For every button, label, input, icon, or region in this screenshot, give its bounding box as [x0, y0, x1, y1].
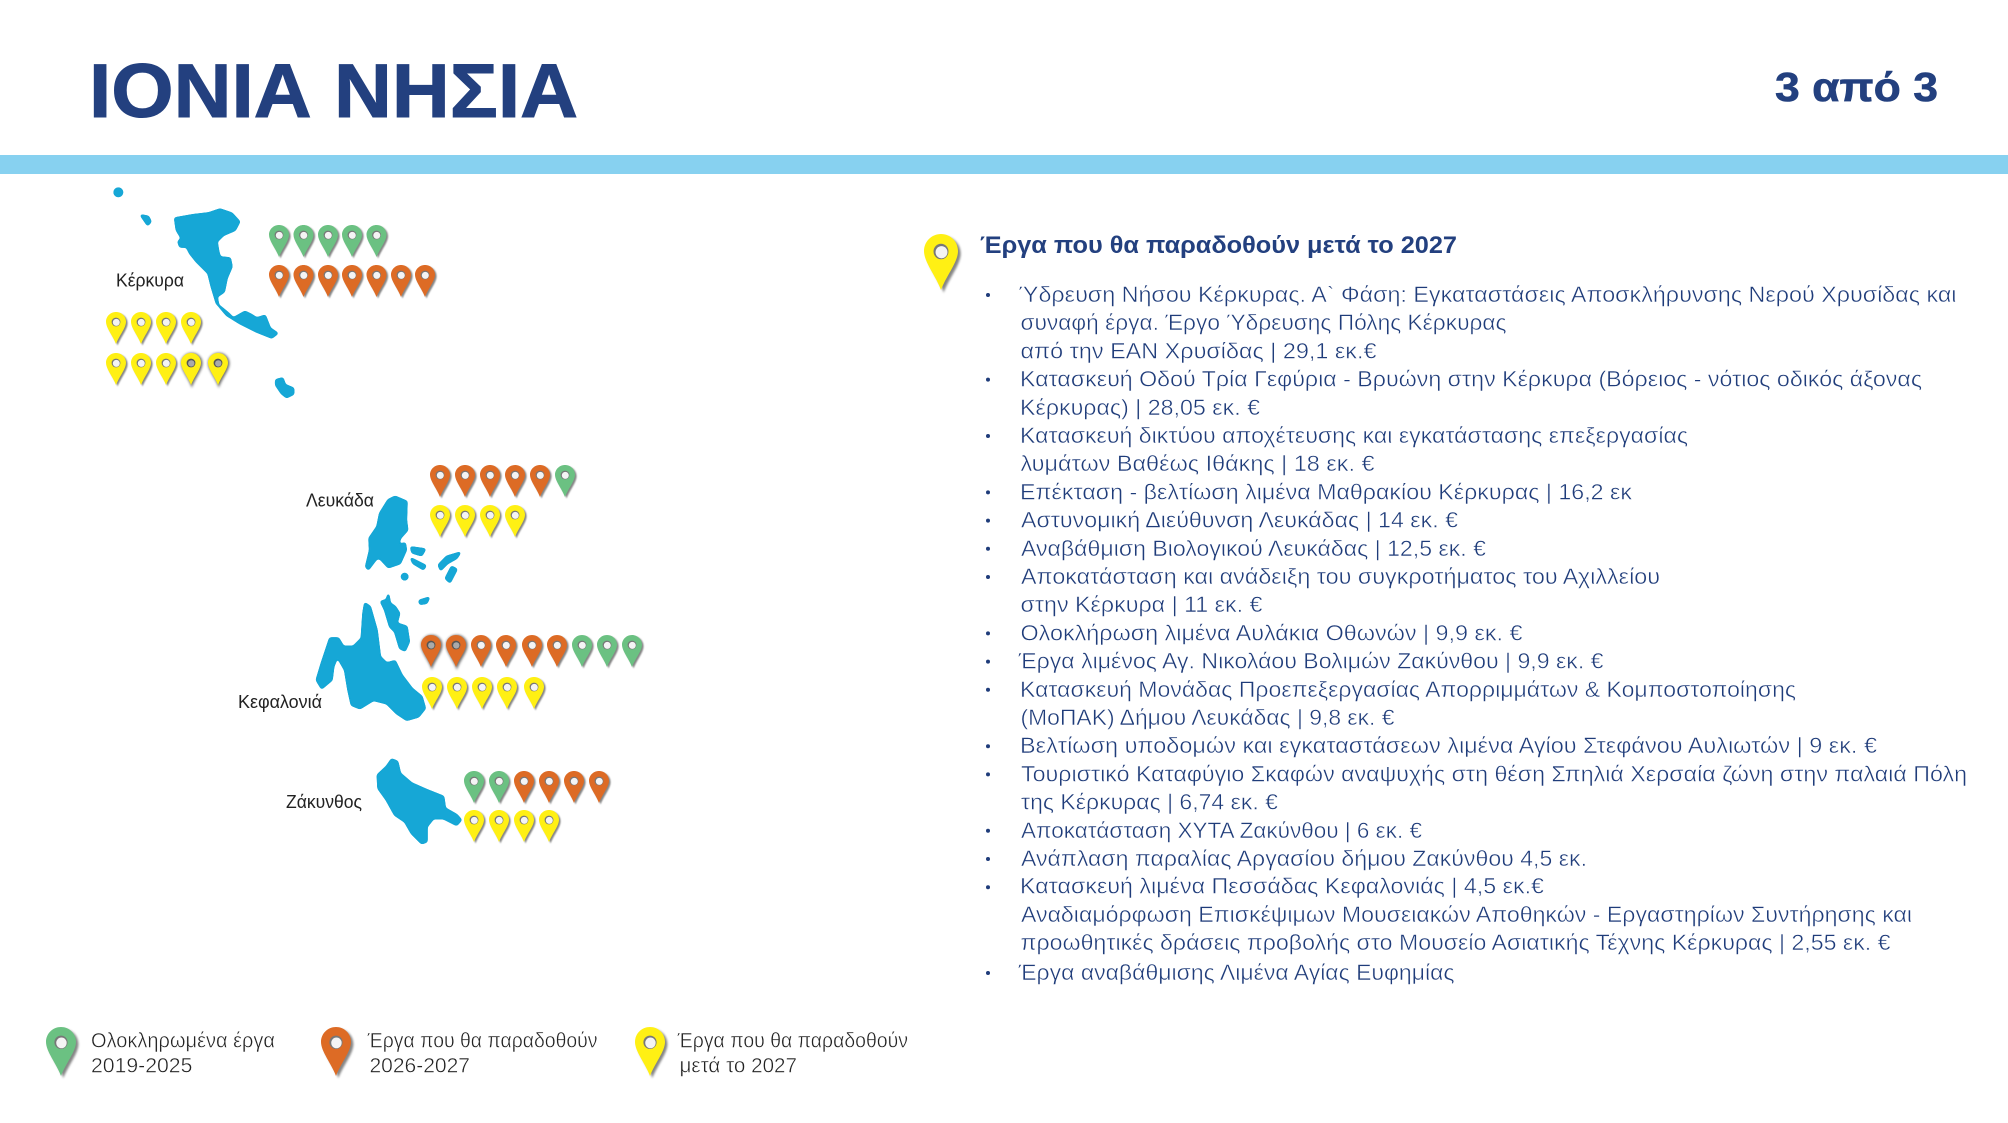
- pins: Corfu completed: [269, 225, 388, 258]
- label: Zakynthos: Ζάκυνθος: [286, 792, 362, 812]
- map: Zakynthos group: [286, 759, 611, 843]
- item 16: Έργα αναβάθμισης Λιμένα Αγίας Ευφημίας: [1017, 960, 1454, 985]
- pins: Kefalonia 2026-2027 and completed: [421, 635, 644, 668]
- item 1: Ύδρευση Νήσου Κέρκυρας. Α` Φάση: Εγκαταστάσεις Αποσκλήρυνσης Νερού Χρυσίδας και: [1018, 282, 1957, 307]
- legend: [46, 1027, 908, 1078]
- pins: Lefkada after 2027: [430, 505, 527, 538]
- item 7: στην Κέρκυρα | 11 εκ. €: [1020, 592, 1262, 617]
- map: Corfu group: [106, 188, 437, 397]
- pins: Corfu after 2027: [106, 312, 229, 386]
- label: Kefalonia: Κεφαλονιά: [238, 692, 322, 712]
- label: Corfu: Κέρκυρα: [116, 271, 184, 291]
- item 9: Έργα λιμένος Αγ. Νικολάου Βολιμών Ζακύνθου | 9,9 εκ. €: [1017, 649, 1604, 674]
- item 1: συναφή έργα. Έργο Ύδρευσης Πόλης Κέρκυρας: [1020, 310, 1506, 335]
- item 10: Κατασκευή Μονάδας Προεπεξεργασίας Απορριμμάτων & Κομποστοποίησης: [1020, 677, 1796, 702]
- project list: [986, 282, 1967, 985]
- item 8: Ολοκλήρωση λιμένα Αυλάκια Οθωνών | 9,9 εκ. €: [1020, 620, 1522, 645]
- title: ΙΟΝΙΑ ΝΗΣΙΑ: [89, 49, 578, 134]
- header band: [0, 155, 2008, 174]
- legend: after 2027: [635, 1027, 908, 1078]
- legend: 2026-2027: [321, 1027, 598, 1078]
- item 15: προωθητικές δράσεις προβολής στο Μουσείο Ασιατικής Τέχνης Κέρκυρας | 2,55 εκ. €: [1020, 930, 1890, 955]
- pins: Kefalonia after 2027: [422, 677, 546, 710]
- item 3: λυμάτων Βαθέως Ιθάκης | 18 εκ. €: [1020, 451, 1374, 476]
- item 12: της Κέρκυρας | 6,74 εκ. €: [1021, 790, 1278, 815]
- item 12: [986, 761, 1967, 815]
- pins: Zakynthos completed and 2026-2027: [464, 771, 611, 804]
- item 2: Κατασκευή Οδού Τρία Γεφύρια - Βρυώνη στην Κέρκυρα (Βόρειος - νότιος οδικός άξονας: [1020, 367, 1922, 392]
- pins: Zakynthos after 2027: [464, 810, 561, 843]
- page counter: 3 από 3: [1775, 64, 1938, 110]
- map: Lefkada group: [306, 465, 577, 604]
- legend: completed: Ολοκληρωμένα έργα: [91, 1030, 275, 1053]
- island: Lefkada and small islands: [366, 497, 460, 604]
- item 12: Τουριστικό Καταφύγιο Σκαφών αναψυχής στη θέση Σπηλιά Χερσαία ζώνη στην παλαιά Πόλη: [1021, 761, 1967, 786]
- item 7: Αποκατάσταση και ανάδειξη του συγκροτήματος του Αχιλλείου: [1021, 564, 1660, 589]
- legend: completed: 2019-2025: [91, 1055, 192, 1078]
- item 1: από την ΕΑΝ Χρυσίδας | 29,1 εκ.€: [1020, 338, 1376, 363]
- item 1: [986, 282, 1957, 363]
- legend: 2026-2027: Έργα που θα παραδοθούν: [367, 1030, 598, 1053]
- pins: Corfu 2026-2027: [269, 265, 437, 298]
- item 7: [986, 564, 1660, 617]
- item 15: Κατασκευή λιμένα Πεσσάδας Κεφαλονιάς | 4,5 εκ.€: [1020, 874, 1544, 899]
- item 2: Κέρκυρας) | 28,05 εκ. €: [1020, 395, 1260, 420]
- item 3: [986, 423, 1688, 476]
- item 3: Κατασκευή δικτύου αποχέτευσης και εγκατάστασης επεξεργασίας: [1020, 423, 1688, 448]
- legend: 2026-2027: 2026-2027: [370, 1055, 470, 1078]
- item 4: Επέκταση - βελτίωση λιμένα Μαθρακίου Κέρκυρας | 16,2 εκ: [1020, 479, 1633, 504]
- legend: after 2027: μετά το 2027: [680, 1055, 797, 1078]
- item 10: (ΜοΠΑΚ) Δήμου Λευκάδας | 9,8 εκ. €: [1020, 705, 1394, 730]
- icon: large yellow pin: [924, 234, 961, 292]
- island: Zakynthos: [378, 759, 461, 843]
- item 6: Αναβάθμιση Βιολογικού Λευκάδας | 12,5 εκ. €: [1021, 536, 1486, 561]
- item 15: Αναδιαμόρφωση Επισκέψιμων Μουσειακών Αποθηκών - Εργαστηρίων Συντήρησης και: [1021, 902, 1912, 927]
- item 10: [986, 677, 1796, 730]
- pins: Lefkada 2026-2027 and completed: [430, 465, 577, 498]
- item 11: Βελτίωση υποδομών και εγκαταστάσεων λιμένα Αγίου Στεφάνου Αυλιωτών | 9 εκ. €: [1020, 733, 1877, 758]
- legend: completed: [46, 1027, 275, 1078]
- item 2: [986, 367, 1922, 420]
- island: Kefalonia and Ithaki: [317, 594, 425, 720]
- legend: after 2027: Έργα που θα παραδοθούν: [677, 1030, 908, 1053]
- map: Kefalonia group: [238, 594, 644, 720]
- list heading: Έργα που θα παραδοθούν μετά το 2027: [980, 232, 1457, 259]
- label: Lefkada: Λευκάδα: [306, 491, 374, 511]
- island: Corfu: [114, 188, 293, 397]
- item 15: [986, 874, 1912, 955]
- item 5: Αστυνομική Διεύθυνση Λευκάδας | 14 εκ. €: [1021, 508, 1458, 533]
- item 14: Ανάπλαση παραλίας Αργασίου δήμου Ζακύνθου 4,5 εκ.: [1021, 846, 1587, 871]
- item 13: Αποκατάσταση ΧΥΤΑ Ζακύνθου | 6 εκ. €: [1021, 818, 1422, 843]
